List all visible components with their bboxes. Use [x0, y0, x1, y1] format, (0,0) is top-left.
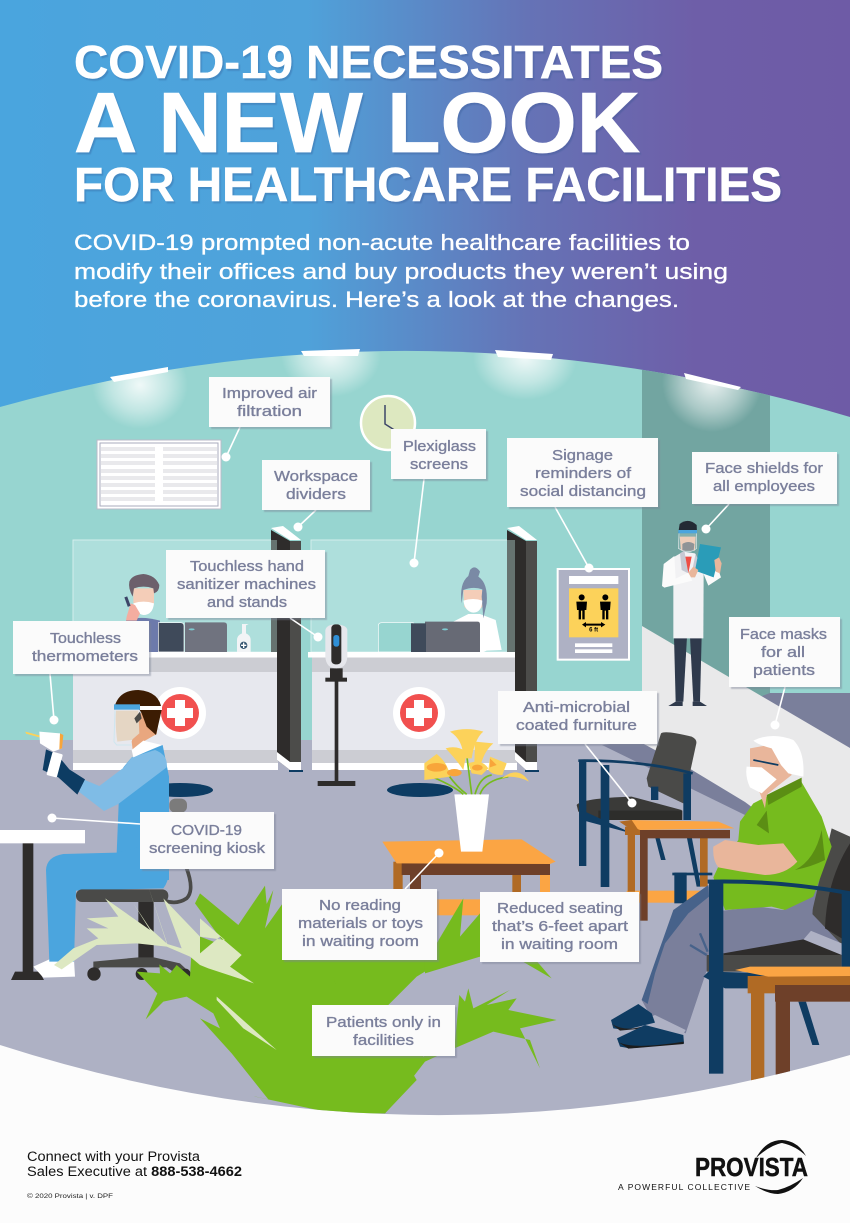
- legs: [46, 847, 169, 962]
- callout: reduced seating: that’s 6-feet apart: [492, 918, 629, 935]
- callout: plexiglass screens: [391, 429, 486, 568]
- floor: [0, 740, 850, 1140]
- background: footer white: [0, 1040, 850, 1223]
- touchless sanitizer stand: [318, 624, 355, 786]
- Provista logo: A POWERFUL COLLECTIVE: [618, 1182, 750, 1192]
- chair seat: [577, 797, 682, 820]
- title: FOR HEALTHCARE FACILITIES: [74, 159, 782, 212]
- glasses: [753, 760, 778, 765]
- footer contact text: Connect with your Provista: [27, 1149, 201, 1164]
- ceiling light glows: [96, 352, 758, 429]
- plant pale frond: [54, 887, 254, 983]
- hair: [753, 736, 804, 777]
- intro paragraph: [74, 230, 728, 312]
- callout: face masks: for all: [761, 644, 805, 661]
- background: header gradient: [0, 0, 850, 430]
- callout: signage reminders: reminders of: [535, 465, 632, 482]
- callout: face shields: Face shields for: [705, 460, 823, 477]
- right plexiglass screen: [311, 540, 515, 652]
- callout: anti-microbial furniture: Anti-microbial: [523, 699, 630, 716]
- patient chair rear frame: [672, 873, 712, 875]
- collar: [767, 778, 802, 805]
- kiosk desk: [23, 843, 33, 973]
- patient shoes: [611, 1004, 655, 1030]
- left laptops and sanitizer bottle: [158, 622, 251, 652]
- glove: [43, 749, 85, 795]
- workspace divider left: [271, 526, 303, 772]
- callout: face shields: all employees: [713, 478, 815, 495]
- callout: reduced seating: [480, 892, 639, 962]
- floor shadows: [147, 783, 453, 797]
- callout: patients only: Patients only in: [326, 1014, 441, 1031]
- seated screener and kiosk: [0, 690, 191, 981]
- callout: improved air filtration: filtration: [237, 403, 302, 420]
- callout: no reading materials: materials or toys: [298, 915, 423, 932]
- callout: plexiglass screens: Plexiglass: [403, 438, 476, 455]
- corridor wall: [642, 370, 770, 696]
- torso: [117, 745, 169, 880]
- title: [74, 36, 782, 212]
- left reception desk: [73, 652, 282, 770]
- air vent: [97, 440, 221, 509]
- intro paragraph: modify their offices and buy products they weren’t using: [74, 259, 728, 284]
- callout: touchless thermometers: thermometers: [32, 648, 138, 665]
- left receptionist on phone: [124, 574, 160, 652]
- callout: face masks: patients: [753, 662, 815, 679]
- callout: improved air filtration: Improved air: [222, 385, 317, 402]
- decorative plant: [54, 886, 557, 1113]
- Provista logo: [618, 1140, 808, 1194]
- callout: touchless thermometers: [13, 621, 149, 724]
- title: A NEW LOOK: [74, 76, 640, 171]
- seated patient in waiting room: [611, 736, 850, 1083]
- callout: plexiglass screens: screens: [410, 456, 468, 473]
- callout: covid-19 screening kiosk: screening kiosk: [149, 840, 266, 857]
- callout: patients only: facilities: [353, 1032, 414, 1049]
- workspace divider right: [507, 526, 539, 772]
- head: [750, 743, 792, 793]
- doctor with face shield and clipboard: [662, 521, 722, 706]
- callout: workspace dividers: [262, 460, 370, 532]
- ceiling lights: [110, 349, 741, 390]
- pants: [642, 886, 813, 1033]
- patient chair seat: [723, 939, 842, 955]
- callout: covid-19 screening kiosk: COVID-19: [171, 822, 242, 839]
- right receptionist: [425, 567, 502, 652]
- callout: reduced seating: in waiting room: [501, 936, 618, 953]
- signage poster: social distancing: [558, 569, 629, 660]
- callout: face masks: [729, 617, 840, 730]
- callout: touchless thermometers: Touchless: [50, 630, 121, 647]
- signage poster: social distancing: 6 ft: [589, 628, 598, 634]
- intro paragraph: COVID-19 prompted non-acute healthcare facilities to: [74, 230, 690, 255]
- footer contact text: [27, 1149, 242, 1179]
- title: COVID-19 NECESSITATES: [74, 36, 663, 88]
- back anti-microbial chair: [577, 732, 701, 887]
- illustrated waiting room scene: [0, 313, 850, 1140]
- chair back: [647, 732, 696, 803]
- shoe: [33, 959, 75, 978]
- forearm: [713, 840, 797, 875]
- copyright: © 2020 Provista | v. DPF: [27, 1192, 113, 1200]
- Provista logo: PROVISTA: [695, 1152, 808, 1182]
- head: [132, 713, 158, 750]
- callout: patients only: [312, 1005, 455, 1056]
- callout: improved air filtration: [209, 377, 330, 462]
- footer contact text: Sales Executive at 888-538-4662: [27, 1164, 242, 1179]
- callout: covid-19 screening kiosk: [48, 812, 274, 869]
- back side table: [619, 820, 734, 921]
- callout: no reading materials: [282, 848, 444, 960]
- callout: touchless hand sanitizer: and stands: [207, 594, 287, 611]
- chair front frame: [579, 760, 586, 866]
- callout: workspace dividers: dividers: [286, 486, 346, 503]
- callout: face shields: [692, 452, 837, 534]
- callout: signage reminders: [507, 438, 658, 572]
- neck: [760, 787, 775, 808]
- callout: no reading materials: No reading: [319, 897, 401, 914]
- callout: signage reminders: Signage: [552, 447, 613, 464]
- front side table: [751, 990, 764, 1083]
- callout: workspace dividers: Workspace: [274, 468, 358, 485]
- callout: face masks: Face masks: [740, 626, 827, 643]
- callout: touchless hand sanitizer: Touchless hand: [190, 558, 304, 575]
- left plexiglass screen: [73, 540, 278, 652]
- patient chair back: [812, 828, 850, 953]
- callout: anti-microbial furniture: [498, 691, 657, 808]
- right laptop back: [378, 623, 426, 652]
- callout: anti-microbial furniture: coated furniture: [516, 717, 637, 734]
- thermometer: [25, 732, 40, 737]
- wall clock: [361, 396, 415, 450]
- callout: touchless hand sanitizer: [166, 550, 325, 642]
- corridor floor: [602, 626, 850, 1000]
- callout: no reading materials: in waiting room: [302, 933, 419, 950]
- intro paragraph: before the coronavirus. Here’s a look at the changes.: [74, 287, 679, 312]
- callout: touchless hand sanitizer: sanitizer machines: [177, 576, 316, 593]
- chair rear frame: [651, 773, 691, 820]
- shirt: [713, 779, 832, 910]
- callout: signage reminders: social distancing: [520, 483, 646, 500]
- mask: [746, 767, 777, 793]
- center flowers in vase on table: [382, 729, 556, 915]
- patient chair front frame: [709, 882, 723, 1074]
- arm: [77, 750, 167, 811]
- plant green fronds: [137, 886, 552, 1113]
- callout: reduced seating: Reduced seating: [497, 900, 623, 917]
- office chair: [169, 799, 187, 813]
- wall: [0, 340, 850, 750]
- lower table shelf: [437, 899, 480, 916]
- right reception desk: [308, 652, 520, 770]
